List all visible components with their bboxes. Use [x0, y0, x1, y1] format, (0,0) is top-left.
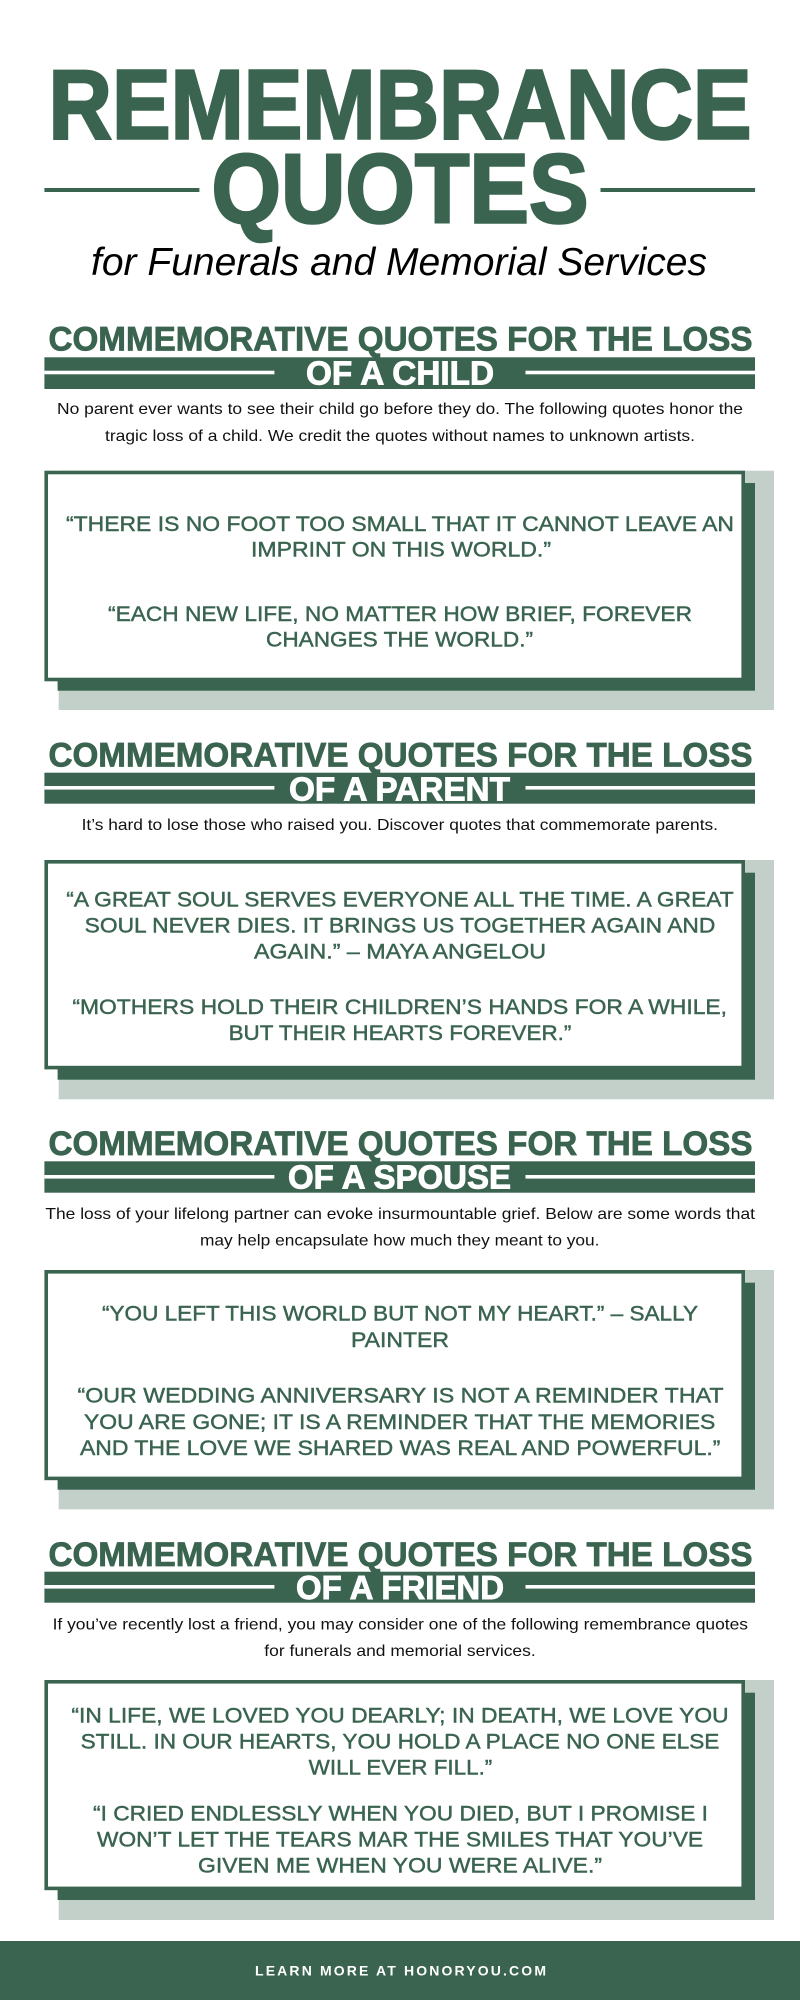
band label: OF A PARENT [289, 770, 510, 808]
band label: OF A CHILD [306, 354, 494, 391]
section heading: COMMEMORATIVE QUOTES FOR THE LOSS [48, 736, 752, 774]
quote 2: “I CRIED ENDLESSLY WHEN YOU DIED, BUT I PROMISE I [93, 1801, 708, 1826]
quote 1 [102, 1301, 698, 1352]
intro text: tragic loss of a child. We credit the quotes without names to unknown artists. [105, 428, 695, 445]
title rule right [600, 188, 755, 192]
intro text: No parent ever wants to see their child go before they do. The following quotes honor the [57, 401, 743, 418]
heading band [44, 773, 755, 804]
quote 2 [78, 1383, 724, 1460]
title [44, 50, 755, 284]
panel: loss of a friend [44, 1536, 774, 1920]
section heading: COMMEMORATIVE QUOTES FOR THE LOSS [48, 1536, 752, 1574]
quote 2: “MOTHERS HOLD THEIR CHILDREN’S HANDS FOR A WHILE, [72, 994, 727, 1019]
quote 2 [93, 1801, 708, 1878]
quote 2: CHANGES THE WORLD.” [266, 627, 533, 652]
quote 1: WILL EVER FILL.” [309, 1755, 492, 1780]
quote 1: SOUL NEVER DIES. IT BRINGS US TOGETHER AGAIN AND [85, 913, 715, 938]
intro text [53, 1616, 748, 1660]
quote 1: “A GREAT SOUL SERVES EVERYONE ALL THE TIME. A GREAT [66, 887, 734, 912]
quote 1 [66, 887, 734, 964]
quote card [46, 860, 774, 1099]
quote 1: IMPRINT ON THIS WORLD.” [251, 537, 551, 562]
quote 1: “YOU LEFT THIS WORLD BUT NOT MY HEART.” – SALLY [102, 1301, 698, 1326]
quote 2: YOU ARE GONE; IT IS A REMINDER THAT THE MEMORIES [84, 1409, 715, 1434]
subtitle: for Funerals and Memorial Services [91, 241, 707, 284]
intro text [45, 1206, 756, 1250]
intro text: It’s hard to lose those who raised you. Discover quotes that commemorate parents. [82, 817, 718, 834]
heading band [44, 1572, 755, 1603]
quote 1: “THERE IS NO FOOT TOO SMALL THAT IT CANNOT LEAVE AN [66, 511, 734, 536]
intro text: The loss of your lifelong partner can evoke insurmountable grief. Below are some words that [45, 1206, 756, 1223]
quote 2: AND THE LOVE WE SHARED WAS REAL AND POWERFUL.” [80, 1435, 720, 1460]
quote 1: PAINTER [351, 1327, 449, 1352]
quote 2: “EACH NEW LIFE, NO MATTER HOW BRIEF, FOREVER [108, 601, 692, 626]
heading band [44, 1161, 755, 1193]
section heading: COMMEMORATIVE QUOTES FOR THE LOSS [48, 1125, 752, 1163]
quote 1 [66, 511, 734, 562]
panel: loss of a child [44, 320, 774, 710]
title line: quotes: QUOTES [212, 134, 588, 244]
quote 2: “OUR WEDDING ANNIVERSARY IS NOT A REMINDER THAT [78, 1383, 724, 1408]
quote 2: BUT THEIR HEARTS FOREVER.” [229, 1020, 571, 1045]
title rule left [44, 188, 199, 192]
quote 1: “IN LIFE, WE LOVED YOU DEARLY; IN DEATH, WE LOVE YOU [71, 1703, 729, 1728]
intro text [57, 401, 743, 445]
intro text: for funerals and memorial services. [264, 1643, 536, 1660]
band label: OF A SPOUSE [288, 1159, 511, 1196]
quote 1: AGAIN.” – MAYA ANGELOU [254, 939, 546, 964]
panel: loss of a parent [44, 736, 774, 1099]
footer text: LEARN MORE AT HONORYOU.COM [255, 1963, 546, 1979]
quote card [46, 1680, 774, 1920]
quote 2 [108, 601, 692, 652]
quote card [46, 471, 774, 710]
intro text: If you’ve recently lost a friend, you may consider one of the following remembrance quotes [53, 1616, 748, 1633]
quote 1: STILL. IN OUR HEARTS, YOU HOLD A PLACE NO ONE ELSE [81, 1729, 719, 1754]
band label: OF A FRIEND [296, 1569, 504, 1606]
quote 2: GIVEN ME WHEN YOU WERE ALIVE.” [198, 1853, 602, 1878]
intro text: may help encapsulate how much they meant to you. [200, 1233, 600, 1250]
panel: loss of a spouse [44, 1125, 774, 1509]
quote 1 [71, 1703, 729, 1780]
quote 2: WON’T LET THE TEARS MAR THE SMILES THAT YOU’VE [97, 1827, 703, 1852]
heading band [44, 357, 755, 389]
quote 2 [72, 994, 727, 1045]
quote card [46, 1270, 774, 1509]
section heading: COMMEMORATIVE QUOTES FOR THE LOSS [48, 320, 752, 358]
footer [0, 1941, 800, 2000]
